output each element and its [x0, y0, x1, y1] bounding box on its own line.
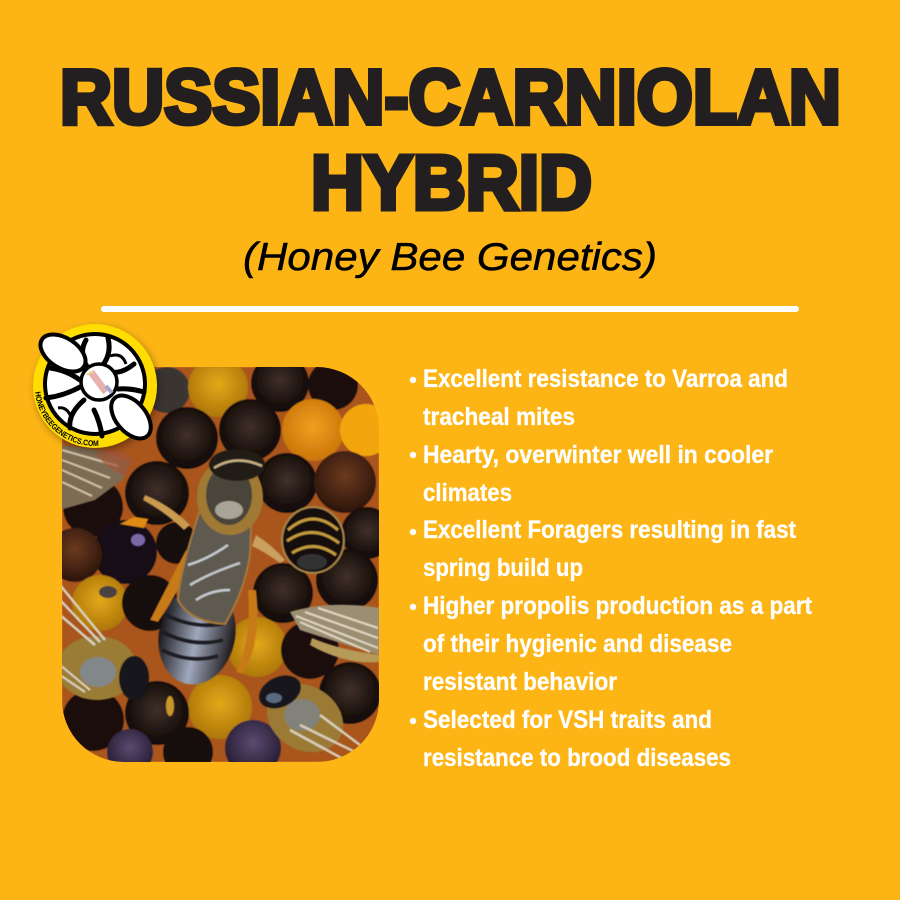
bullet 4: resistant behavior: [423, 668, 617, 696]
bee lower left: [57, 585, 149, 700]
badge bee disc: [45, 334, 145, 436]
badge url text: HONEYBEEGENETICS.COM: [35, 392, 98, 446]
subtitle: (Honey Bee Genetics): [243, 236, 657, 279]
queen legs: [150, 550, 192, 622]
bullet 4: of their hygienic and disease: [423, 630, 732, 658]
title: [60, 54, 841, 226]
bullet 1: tracheal mites: [423, 403, 575, 431]
bee right wings: [290, 605, 380, 662]
bullet list: [410, 365, 813, 772]
badge lower wing: [103, 388, 159, 446]
badge center with dna: [81, 364, 117, 400]
queen thorax: [197, 459, 263, 535]
bullet 3: [410, 516, 797, 582]
bullet 3: spring build up: [423, 554, 583, 582]
honeycomb background: [62, 367, 379, 762]
queen bee: [143, 449, 285, 692]
badge upper wing: [34, 327, 92, 379]
bullet 1: [410, 365, 788, 431]
bullet 5: [410, 706, 731, 772]
bullet 2: [410, 441, 773, 507]
bee upper left wings: [60, 445, 132, 510]
queen abdomen: [158, 596, 236, 686]
photo: queen bee on honeycomb: [62, 367, 379, 762]
side bee in cell: [282, 507, 344, 573]
divider line: [101, 306, 799, 312]
queen wings: [178, 510, 252, 624]
title: RUSSIAN-CARNIOLAN: [60, 54, 841, 140]
bullet 5: resistance to brood diseases: [423, 744, 731, 772]
queen head: [209, 449, 265, 481]
bullet 1: Excellent resistance to Varroa and: [423, 365, 788, 393]
bullet 2: climates: [423, 479, 512, 507]
bullet 4: Higher propolis production as a part: [423, 592, 813, 620]
bullet 3: Excellent Foragers resulting in fast: [423, 516, 797, 544]
bullet 5: Selected for VSH traits and: [423, 706, 712, 734]
bullet 4: [410, 592, 813, 696]
title: HYBRID: [311, 140, 592, 226]
logo badge: honeybeegenetics.com: [30, 322, 160, 454]
bullet 2: Hearty, overwinter well in cooler: [423, 441, 773, 469]
bee lower right: [258, 674, 361, 758]
